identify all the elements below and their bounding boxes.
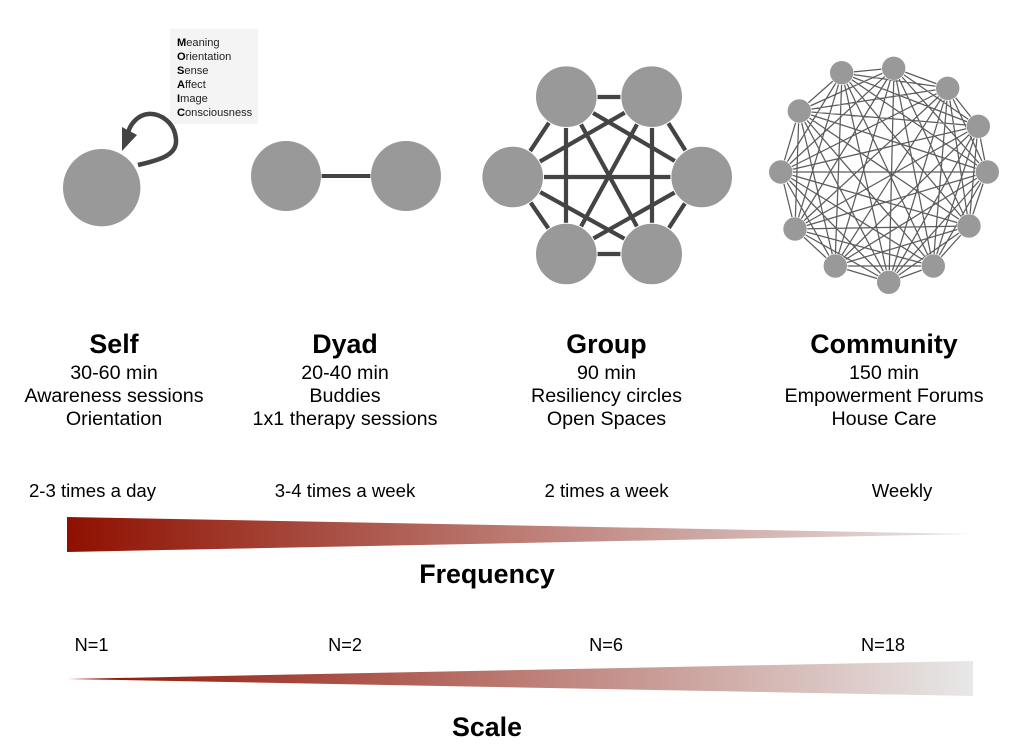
scale labels: N=6 [589, 635, 623, 655]
text block: community: Empowerment Forums [784, 385, 984, 407]
frequency labels: 2 times a week [544, 480, 669, 501]
text block: group: Open Spaces [547, 408, 666, 430]
frequency wedge [67, 517, 972, 552]
text block: group: Group [566, 329, 647, 359]
frequency heading: Frequency [419, 559, 555, 589]
text block: self [24, 329, 204, 430]
MOSAIC acronym box: Affect [177, 79, 206, 91]
MOSAIC acronym box: Sense [177, 65, 208, 77]
scale labels: N=2 [328, 635, 362, 655]
MOSAIC acronym box: Consciousness [177, 107, 253, 119]
text block: community: 150 min [849, 362, 919, 384]
frequency labels: 3-4 times a week [275, 480, 416, 501]
text block: self: 30-60 min [70, 362, 158, 384]
text block: dyad: Dyad [312, 329, 378, 359]
text block: dyad [253, 329, 438, 430]
text block: self: Self [89, 329, 139, 359]
text block: dyad: 1x1 therapy sessions [253, 408, 438, 430]
text block: group: Resiliency circles [531, 385, 682, 407]
panel: self diagram [63, 29, 258, 227]
scale labels: N=1 [75, 635, 108, 655]
scale labels [75, 635, 905, 655]
text block: community: Community [810, 329, 958, 359]
icon: self-loop arrow [122, 114, 176, 165]
scale labels: N=18 [861, 635, 905, 655]
self node [63, 149, 141, 227]
panel: dyad diagram [251, 141, 441, 211]
text block: group [531, 329, 682, 430]
frequency labels: Weekly [872, 480, 933, 501]
text block: self: Orientation [66, 408, 162, 430]
text block: dyad: 20-40 min [301, 362, 389, 384]
scale wedge [68, 661, 973, 696]
frequency labels [29, 480, 933, 501]
panel: community diagram [769, 56, 999, 294]
text block: community: House Care [831, 408, 937, 430]
MOSAIC acronym box: Orientation [177, 51, 231, 63]
panel: group diagram [482, 66, 732, 285]
MOSAIC acronym box [170, 29, 258, 124]
text block: dyad: Buddies [309, 385, 381, 407]
MOSAIC acronym box: Meaning [177, 37, 220, 49]
text block: group: 90 min [577, 362, 636, 384]
MOSAIC acronym box: Image [177, 93, 208, 105]
text block: self: Awareness sessions [24, 385, 204, 407]
frequency labels: 2-3 times a day [29, 480, 157, 501]
text block: community [784, 329, 984, 430]
scale heading: Scale [452, 712, 522, 742]
